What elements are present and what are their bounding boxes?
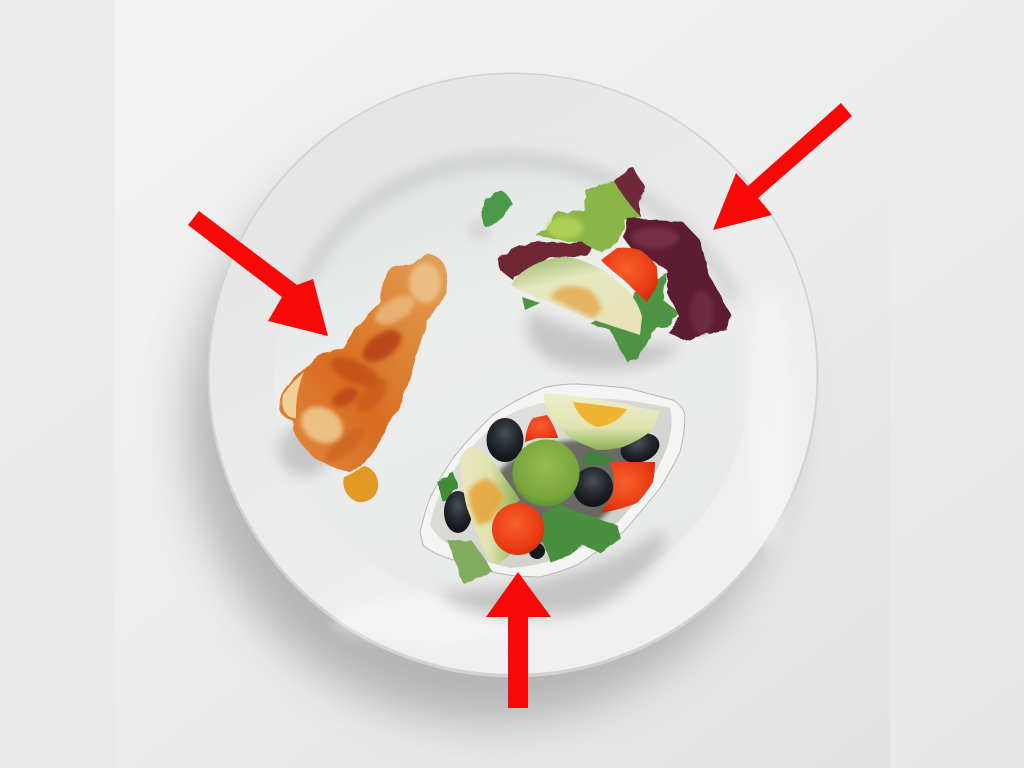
avocado slice xyxy=(511,257,642,335)
plate shadow xyxy=(188,122,788,722)
cherry tomato xyxy=(492,503,544,555)
red lettuce top xyxy=(613,167,645,218)
left avocado xyxy=(460,446,520,565)
arrow: upper right xyxy=(713,103,852,230)
small leaf xyxy=(480,190,512,229)
salad bowl xyxy=(420,384,685,583)
upper salad xyxy=(496,167,730,362)
lime xyxy=(512,440,580,506)
sauce drop xyxy=(343,466,378,502)
food shadows xyxy=(279,222,680,618)
green lettuce xyxy=(537,180,642,253)
top avocado centre xyxy=(573,402,627,427)
plate well xyxy=(274,148,750,608)
avocado pit mark xyxy=(550,286,602,318)
plate xyxy=(208,72,818,678)
red lettuce right xyxy=(623,218,730,340)
olives xyxy=(486,418,524,462)
left avocado centre xyxy=(468,478,505,525)
bowl greens xyxy=(543,505,620,562)
arrow: bottom xyxy=(486,572,551,708)
red lettuce left xyxy=(496,242,593,280)
tomato wedge xyxy=(601,248,658,302)
chicken drumstick xyxy=(280,253,447,472)
tomato pieces xyxy=(525,415,558,442)
top avocado xyxy=(543,393,660,450)
arrow: left xyxy=(188,211,328,336)
lower green leaves xyxy=(590,273,680,362)
